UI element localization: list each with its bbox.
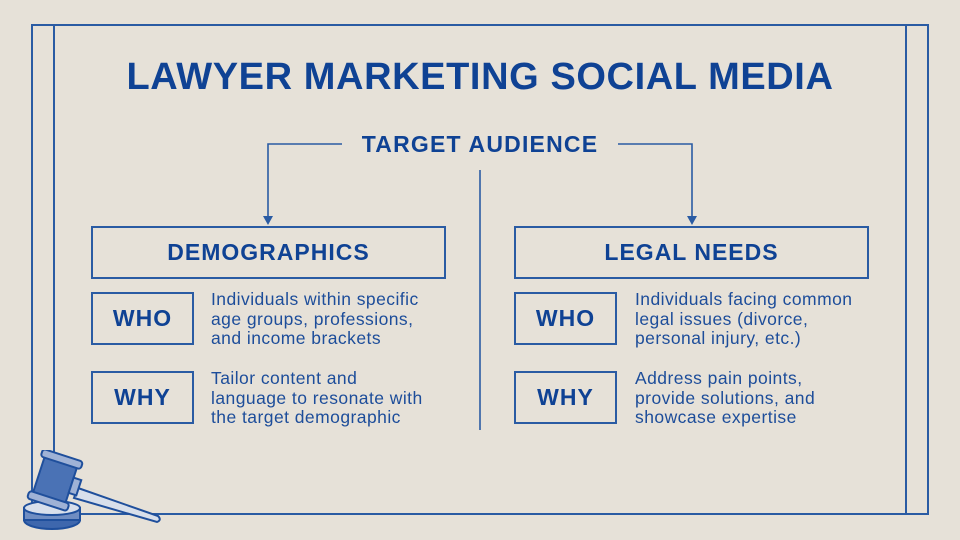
legal why text	[635, 368, 815, 427]
icon: gavel	[23, 450, 161, 530]
legal why: WHY	[537, 384, 594, 410]
demographics why text: Tailor content and	[211, 368, 357, 388]
panel: legal needs: LEGAL NEEDS	[604, 239, 779, 265]
demographics who text: Individuals within specific	[211, 289, 419, 309]
legal who text: Individuals facing common	[635, 289, 852, 309]
panel: demographics: DEMOGRAPHICS	[167, 239, 370, 265]
title: LAWYER MARKETING SOCIAL MEDIA	[126, 56, 834, 98]
legal why text: Address pain points,	[635, 368, 803, 388]
legal who text	[635, 289, 852, 348]
demographics who text: and income brackets	[211, 328, 381, 348]
demographics who text	[211, 289, 419, 348]
legal who text: legal issues (divorce,	[635, 308, 808, 328]
demographics who text: age groups, professions,	[211, 308, 413, 328]
legal why	[514, 371, 617, 424]
legal who	[514, 292, 617, 345]
demographics why: WHY	[114, 384, 171, 410]
demographics why text: language to resonate with	[211, 388, 423, 408]
legal why text: showcase expertise	[635, 407, 797, 427]
demographics why text: the target demographic	[211, 407, 401, 427]
demographics why text	[211, 368, 423, 427]
panel: legal needs	[514, 226, 869, 279]
demographics who	[91, 292, 194, 345]
panel: demographics	[91, 226, 446, 279]
demographics why	[91, 371, 194, 424]
demographics who: WHO	[113, 305, 172, 331]
subtitle: target audience: TARGET AUDIENCE	[362, 131, 598, 157]
legal who: WHO	[536, 305, 595, 331]
legal who text: personal injury, etc.)	[635, 328, 801, 348]
legal why text: provide solutions, and	[635, 388, 815, 408]
